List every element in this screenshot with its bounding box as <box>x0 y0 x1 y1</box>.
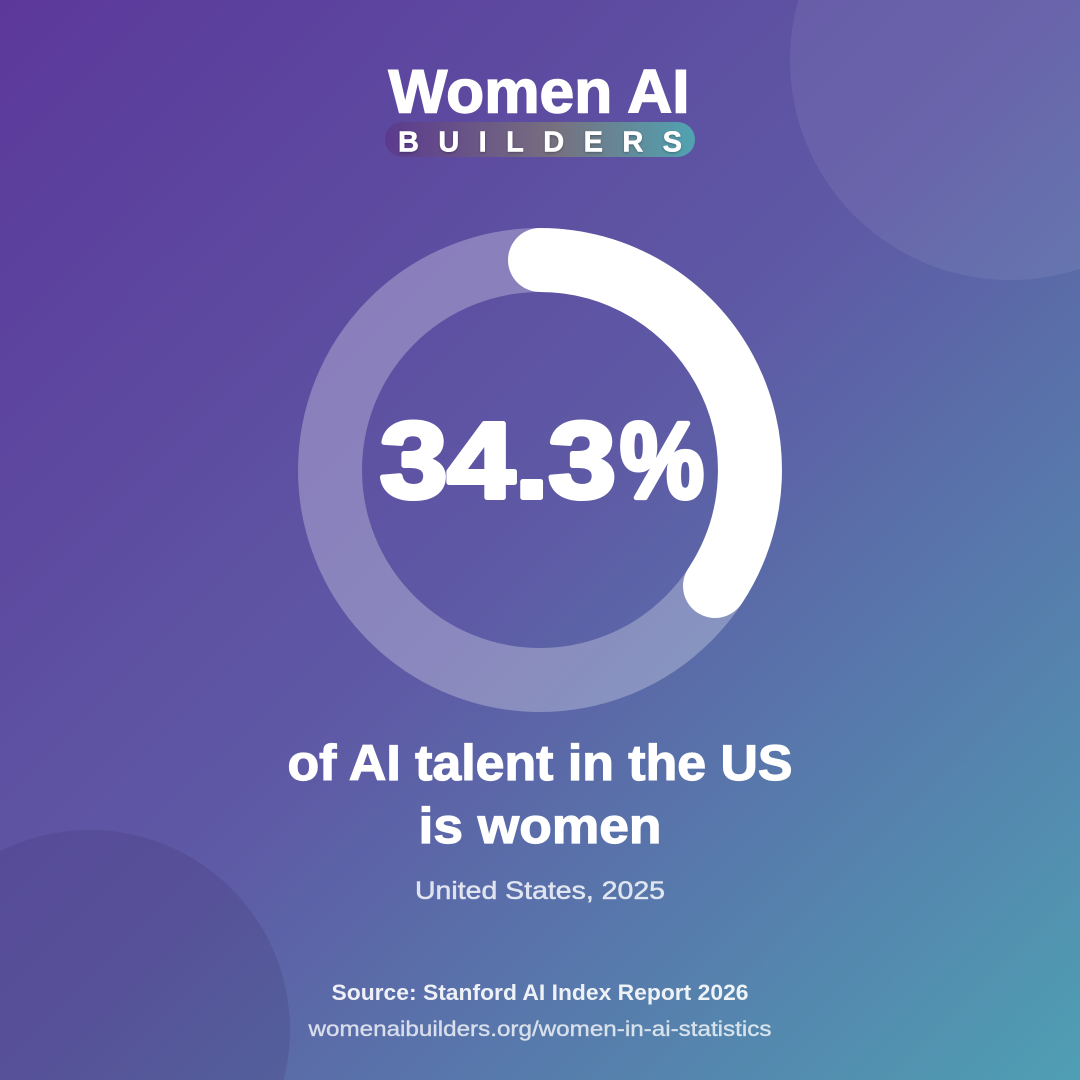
logo wordmark: Women AI <box>388 58 690 126</box>
logo pill <box>385 122 695 157</box>
decorative circle: bottom left <box>0 830 290 1080</box>
donut value label <box>380 400 704 520</box>
headline line 2: is women <box>418 798 662 854</box>
decorative circle: top right <box>790 0 1080 280</box>
logo <box>385 58 695 158</box>
donut value label: % <box>620 400 704 520</box>
donut value label: 34.3 <box>380 400 616 520</box>
logo subtitle: BUILDERS <box>398 126 682 158</box>
headline line 1: of AI talent in the US <box>288 735 792 791</box>
source: Source: Stanford AI Index Report 2026 <box>332 980 748 1005</box>
website url: womenaibuilders.org/women-in-ai-statistics <box>307 1018 772 1041</box>
location and year: United States, 2025 <box>415 877 665 905</box>
donut track <box>330 260 750 680</box>
donut value arc: 34.3% <box>540 260 750 586</box>
headline <box>288 735 792 854</box>
donut chart <box>330 260 750 680</box>
